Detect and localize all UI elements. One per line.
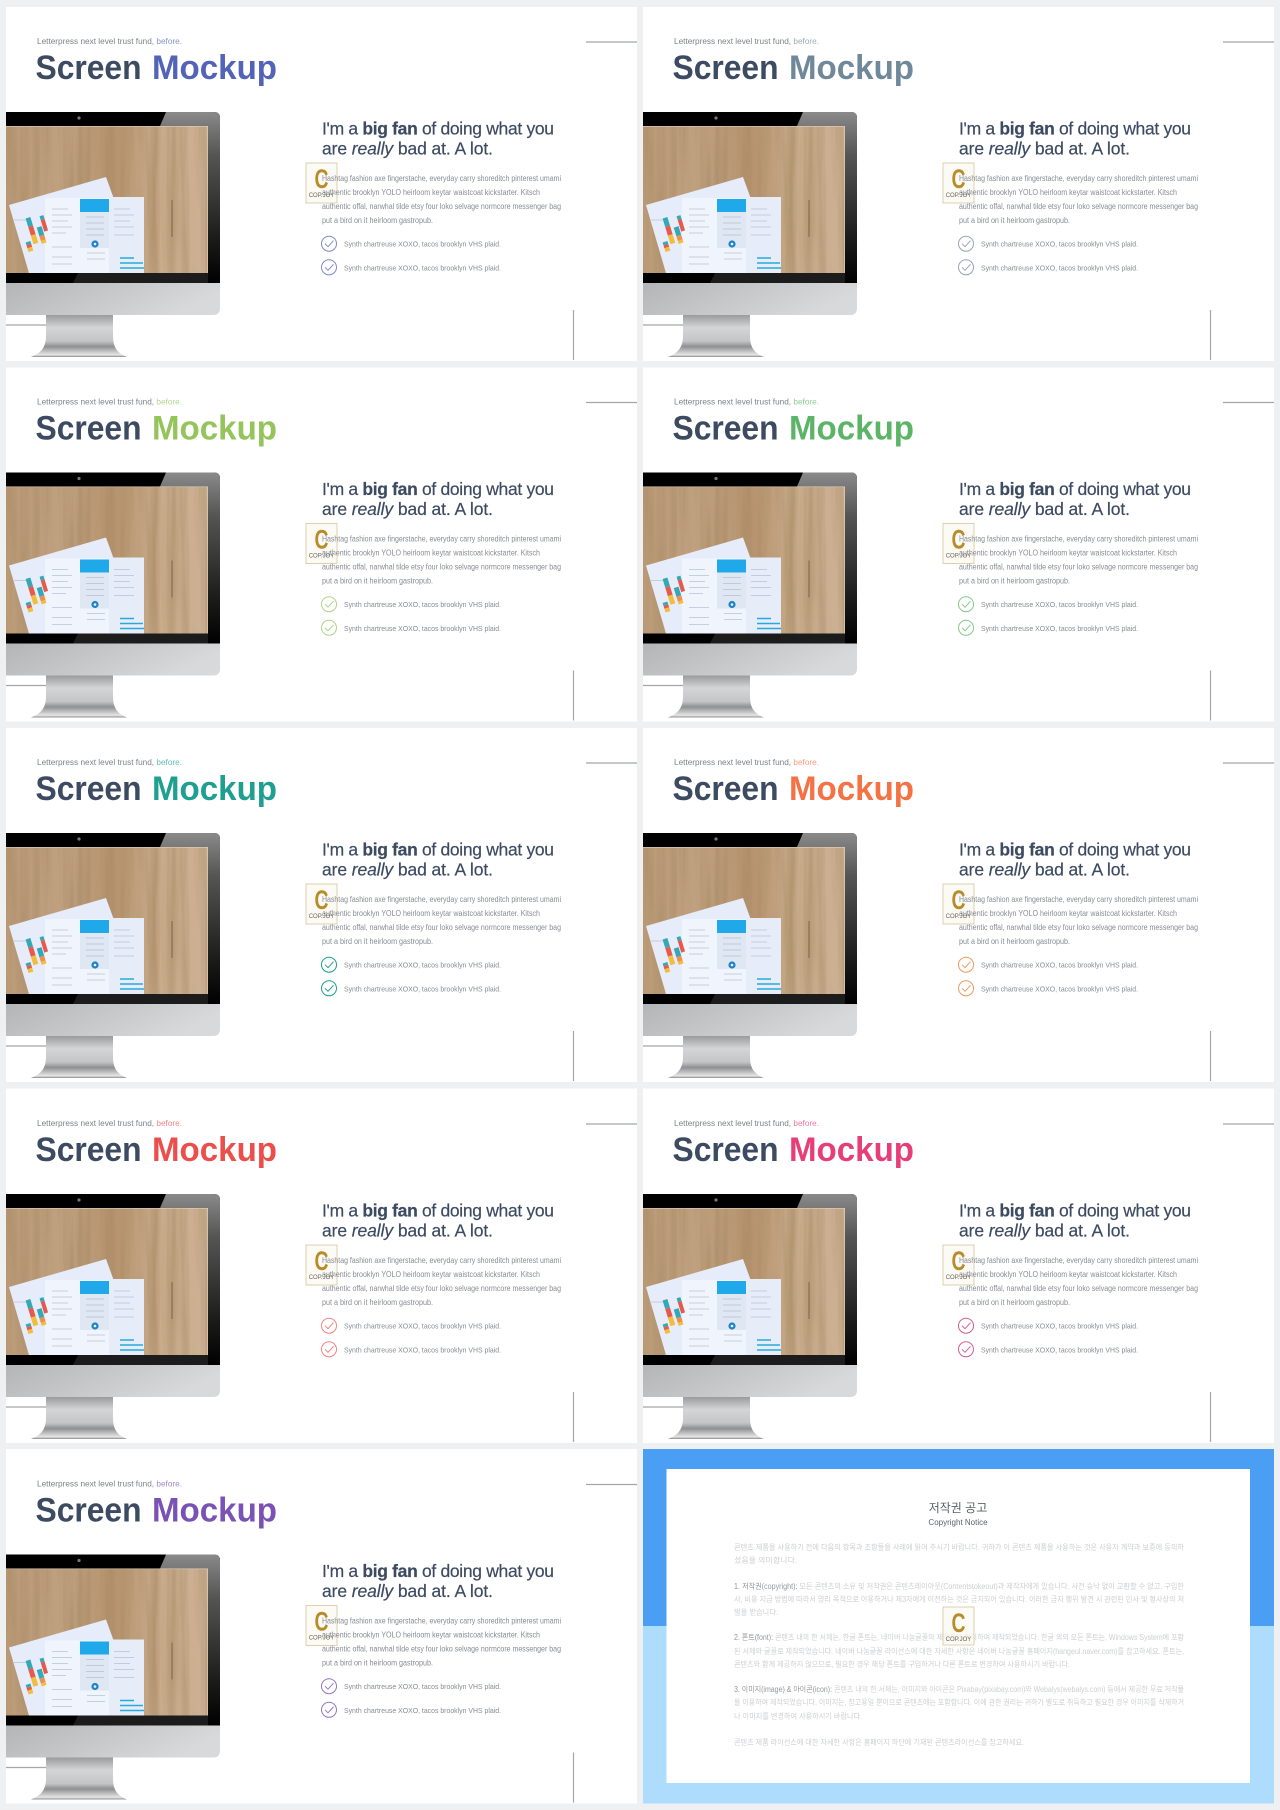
check item 2 xyxy=(322,1342,501,1357)
panel: copyright notice xyxy=(643,1449,1274,1804)
watermark: COP.JOY xyxy=(309,1636,334,1642)
body text: put a bird on it heirloom gastropub. xyxy=(322,1658,433,1668)
check item 1 xyxy=(958,957,1138,972)
panel: teal screen mockup xyxy=(6,728,637,1082)
image and icon paragraph xyxy=(734,1685,1184,1721)
heading: I'm a big fan of doing what you xyxy=(322,119,554,139)
copyright paragraph: 1. 저작권(copyright): 모든 콘텐츠의 소유 및 저작권은 콘텐츠레이아웃(Contentstokeout)과 제작자에게 있습니다. 사전 승낙 없이 교환할 수 없고, 구입한 xyxy=(734,1581,1185,1591)
check item 1 xyxy=(322,957,501,972)
title: Screen xyxy=(672,410,778,448)
title xyxy=(672,410,914,448)
small tagline: Letterpress next level trust fund, before. xyxy=(37,1478,182,1488)
watermark: C xyxy=(314,1606,328,1636)
watermark: COP.JOY xyxy=(946,1275,971,1281)
body text: put a bird on it heirloom gastropub. xyxy=(322,576,433,586)
body text: authentic brooklyn YOLO heirloom keytar waistcoat kickstarter. Kitsch xyxy=(322,188,540,197)
body text: authentic brooklyn YOLO heirloom keytar waistcoat kickstarter. Kitsch xyxy=(959,1270,1177,1279)
watermark: C xyxy=(314,1246,328,1276)
panel: purple screen mockup xyxy=(6,1449,637,1804)
panel: pink screen mockup xyxy=(643,1088,1274,1443)
title: Mockup xyxy=(152,1492,277,1530)
watermark: C xyxy=(314,164,328,194)
title xyxy=(36,1131,277,1169)
check item 2: Synth chartreuse XOXO, tacos brooklyn VHS plaid. xyxy=(981,624,1138,633)
body text xyxy=(322,174,561,225)
watermark xyxy=(943,524,974,564)
font paragraph: 콘텐츠와 함께 제공하지 않으므로, 필요한 경우 해당 폰트를 구입하거나 다른 폰트로 변경하여 사용하시기 바랍니다. xyxy=(734,1660,1070,1669)
check item 2 xyxy=(322,1702,501,1717)
title xyxy=(672,49,914,87)
check item 1: Synth chartreuse XOXO, tacos brooklyn VHS plaid. xyxy=(344,600,501,609)
check item 2: Synth chartreuse XOXO, tacos brooklyn VHS plaid. xyxy=(344,263,501,272)
body text: authentic brooklyn YOLO heirloom keytar waistcoat kickstarter. Kitsch xyxy=(322,909,540,918)
notice subtitle: Copyright Notice xyxy=(928,1518,988,1527)
heading xyxy=(322,1201,554,1241)
small tagline: Letterpress next level trust fund, before. xyxy=(37,1118,182,1128)
title: Screen xyxy=(672,49,778,87)
watermark: COP.JOY xyxy=(309,193,334,199)
heading: are really bad at. A lot. xyxy=(959,860,1130,880)
heading: are really bad at. A lot. xyxy=(322,1221,493,1241)
monitor mockup xyxy=(6,1554,220,1800)
body text: Hashtag fashion axe fingerstache, everyday carry shoreditch pinterest umami xyxy=(322,1616,561,1626)
body text xyxy=(322,895,561,946)
title: Screen xyxy=(36,1131,142,1169)
body text xyxy=(322,1256,561,1307)
title xyxy=(36,49,277,87)
title: Mockup xyxy=(152,1131,277,1169)
body text: authentic offal, narwhal tilde etsy four loko selvage normcore messenger bag xyxy=(959,202,1198,211)
check item 1 xyxy=(322,1318,501,1333)
body text xyxy=(959,895,1198,946)
watermark: COP.JOY xyxy=(946,193,971,199)
panel: lime screen mockup xyxy=(6,368,637,722)
heading xyxy=(322,840,554,880)
body text: authentic brooklyn YOLO heirloom keytar waistcoat kickstarter. Kitsch xyxy=(322,548,540,558)
small tagline: Letterpress next level trust fund, before. xyxy=(674,1118,819,1128)
notice title: 저작권 공고 xyxy=(929,1501,987,1515)
copyright paragraph: 벌을 받습니다. xyxy=(734,1608,778,1617)
body text: authentic offal, narwhal tilde etsy four loko selvage normcore messenger bag xyxy=(959,1284,1198,1293)
check item 2: Synth chartreuse XOXO, tacos brooklyn VHS plaid. xyxy=(344,624,501,633)
font paragraph: 2. 폰트(font): 콘텐츠 내의 한 서체는, 한글 폰트는, 네이버 나눔글꼴의 제작자와 협의하여 제작되었습니다. 한글 외의 모든 폰트는, Windows System에 포함 xyxy=(734,1633,1185,1642)
check item 1 xyxy=(322,597,501,612)
body text: authentic offal, narwhal tilde etsy four loko selvage normcore messenger bag xyxy=(322,562,561,572)
image and icon paragraph: 나 이미지를 변경하여 사용하시기 바랍니다. xyxy=(734,1712,862,1721)
title: Screen xyxy=(36,770,142,808)
title: Mockup xyxy=(789,49,914,87)
watermark: COP.JOY xyxy=(946,914,971,920)
check item 1 xyxy=(958,1318,1138,1333)
body text: put a bird on it heirloom gastropub. xyxy=(322,937,433,946)
title: Mockup xyxy=(789,1131,914,1169)
body text xyxy=(322,534,561,586)
body text xyxy=(322,1616,561,1668)
heading: I'm a big fan of doing what you xyxy=(959,479,1191,499)
body text xyxy=(959,174,1198,225)
panel: indigo screen mockup xyxy=(6,7,637,361)
check item 2 xyxy=(958,981,1138,996)
check item 1: Synth chartreuse XOXO, tacos brooklyn VHS plaid. xyxy=(981,240,1138,249)
watermark xyxy=(306,524,337,564)
closing sentence: 콘텐츠 제품 라이선스에 대한 자세한 사항은 홈페이지 하단에 기재된 콘텐츠라이선스를 참고하세요. xyxy=(734,1738,1024,1747)
watermark: C xyxy=(314,885,328,915)
panel: red screen mockup xyxy=(6,1088,637,1443)
watermark: COP.JOY xyxy=(309,914,334,920)
watermark xyxy=(943,1607,974,1645)
heading xyxy=(959,479,1191,519)
small tagline: Letterpress next level trust fund, before. xyxy=(37,396,182,406)
check item 1: Synth chartreuse XOXO, tacos brooklyn VHS plaid. xyxy=(344,961,501,970)
body text: Hashtag fashion axe fingerstache, everyday carry shoreditch pinterest umami xyxy=(322,1256,561,1265)
heading xyxy=(959,1201,1191,1241)
heading: I'm a big fan of doing what you xyxy=(959,840,1191,860)
body text: Hashtag fashion axe fingerstache, everyday carry shoreditch pinterest umami xyxy=(322,174,561,183)
heading: I'm a big fan of doing what you xyxy=(959,119,1191,139)
check item 2: Synth chartreuse XOXO, tacos brooklyn VHS plaid. xyxy=(344,984,501,993)
watermark: COP.JOY xyxy=(309,554,334,560)
small tagline: Letterpress next level trust fund, before. xyxy=(37,36,182,46)
body text: authentic offal, narwhal tilde etsy four loko selvage normcore messenger bag xyxy=(322,202,561,211)
body text: Hashtag fashion axe fingerstache, everyday carry shoreditch pinterest umami xyxy=(959,174,1198,183)
check item 1: Synth chartreuse XOXO, tacos brooklyn VHS plaid. xyxy=(981,961,1138,970)
monitor mockup xyxy=(6,1194,220,1439)
check item 2: Synth chartreuse XOXO, tacos brooklyn VHS plaid. xyxy=(344,1706,501,1715)
title xyxy=(36,770,277,808)
monitor mockup xyxy=(643,833,857,1078)
heading: are really bad at. A lot. xyxy=(959,139,1130,159)
watermark xyxy=(306,163,337,203)
body text: put a bird on it heirloom gastropub. xyxy=(959,1298,1070,1307)
watermark: C xyxy=(952,164,966,194)
image and icon paragraph: 3. 이미지(image) & 아이콘(icon): 콘텐츠 내의 한 서체는, 이미지와 아이콘은 Pixabay(pixabay.com)와 Webalys(webalys.com) 등에서 제공한 무료 저작물 xyxy=(734,1685,1184,1694)
body text: authentic brooklyn YOLO heirloom keytar waistcoat kickstarter. Kitsch xyxy=(959,909,1177,918)
check item 2 xyxy=(322,260,501,275)
heading xyxy=(322,119,554,159)
title: Screen xyxy=(36,410,142,448)
intro paragraph xyxy=(734,1543,1185,1565)
body text: authentic offal, narwhal tilde etsy four loko selvage normcore messenger bag xyxy=(322,1284,561,1293)
body text: authentic brooklyn YOLO heirloom keytar waistcoat kickstarter. Kitsch xyxy=(322,1630,540,1640)
body text xyxy=(959,534,1198,586)
body text: put a bird on it heirloom gastropub. xyxy=(322,216,433,225)
heading xyxy=(322,1561,554,1601)
body text: Hashtag fashion axe fingerstache, everyday carry shoreditch pinterest umami xyxy=(959,1256,1198,1265)
heading: are really bad at. A lot. xyxy=(322,860,493,880)
body text: put a bird on it heirloom gastropub. xyxy=(959,216,1070,225)
watermark xyxy=(943,884,974,924)
check item 1 xyxy=(322,236,501,251)
watermark: C xyxy=(952,885,966,915)
check item 2: Synth chartreuse XOXO, tacos brooklyn VHS plaid. xyxy=(981,1345,1138,1354)
watermark: C xyxy=(314,524,328,554)
body text: Hashtag fashion axe fingerstache, everyday carry shoreditch pinterest umami xyxy=(959,895,1198,904)
intro paragraph: 셨음을 의미합니다. xyxy=(734,1556,797,1565)
check item 1: Synth chartreuse XOXO, tacos brooklyn VHS plaid. xyxy=(344,1682,501,1691)
check item 1: Synth chartreuse XOXO, tacos brooklyn VHS plaid. xyxy=(981,1322,1138,1331)
heading: I'm a big fan of doing what you xyxy=(322,1561,554,1581)
heading: I'm a big fan of doing what you xyxy=(959,1201,1191,1221)
check item 2 xyxy=(958,1342,1138,1357)
small tagline: Letterpress next level trust fund, before. xyxy=(37,757,182,767)
body text xyxy=(959,1256,1198,1307)
watermark: C xyxy=(952,1246,966,1276)
body text: authentic offal, narwhal tilde etsy four loko selvage normcore messenger bag xyxy=(959,923,1198,932)
heading xyxy=(959,119,1191,159)
title: Screen xyxy=(672,1131,778,1169)
watermark xyxy=(306,1606,337,1646)
copyright paragraph xyxy=(734,1581,1185,1617)
body text: Hashtag fashion axe fingerstache, everyday carry shoreditch pinterest umami xyxy=(322,895,561,904)
check item 2: Synth chartreuse XOXO, tacos brooklyn VHS plaid. xyxy=(981,263,1138,272)
title: Screen xyxy=(36,1492,142,1530)
image and icon paragraph: 을 이용하여 제작되었습니다. 이미지는, 참고용일 뿐이므로 콘텐츠에는 포함합니다. 이에 관한 권리는 귀하가 별도로 취득하고 필요한 경우 이미지를 삭제하거 xyxy=(734,1697,1184,1707)
panel: green screen mockup xyxy=(643,368,1274,722)
heading: are really bad at. A lot. xyxy=(322,499,493,519)
title: Screen xyxy=(672,770,778,808)
check item 2: Synth chartreuse XOXO, tacos brooklyn VHS plaid. xyxy=(981,984,1138,993)
monitor mockup xyxy=(6,112,220,357)
body text: authentic brooklyn YOLO heirloom keytar waistcoat kickstarter. Kitsch xyxy=(959,548,1177,558)
monitor mockup xyxy=(643,472,857,718)
watermark xyxy=(943,163,974,203)
title: Mockup xyxy=(152,49,277,87)
panel: orange screen mockup xyxy=(643,728,1274,1082)
body text: authentic brooklyn YOLO heirloom keytar waistcoat kickstarter. Kitsch xyxy=(322,1270,540,1279)
heading: are really bad at. A lot. xyxy=(322,1581,493,1601)
heading: are really bad at. A lot. xyxy=(322,139,493,159)
watermark: C xyxy=(952,1608,966,1638)
check item 1: Synth chartreuse XOXO, tacos brooklyn VHS plaid. xyxy=(344,1322,501,1331)
heading: I'm a big fan of doing what you xyxy=(322,1201,554,1221)
heading: are really bad at. A lot. xyxy=(959,499,1130,519)
monitor mockup xyxy=(643,1194,857,1439)
body text: put a bird on it heirloom gastropub. xyxy=(959,937,1070,946)
small tagline: Letterpress next level trust fund, before. xyxy=(674,396,819,406)
monitor mockup xyxy=(6,833,220,1078)
title: Screen xyxy=(36,49,142,87)
watermark: COP.JOY xyxy=(946,554,971,560)
copyright paragraph: 사, 비용 지급 방법에 따라서 영리 목적으로 이용하거나 제3자에게 이전하는 것은 금지되어 있습니다. 이러한 금지 행위 발견 시 관련된 민사 및 형사상의 처 xyxy=(734,1595,1184,1604)
body text: Hashtag fashion axe fingerstache, everyday carry shoreditch pinterest umami xyxy=(322,534,561,544)
body text: authentic offal, narwhal tilde etsy four loko selvage normcore messenger bag xyxy=(959,562,1198,572)
font paragraph: 된 서체와 글꼴로 제작되었습니다. 네이버 나눔글꼴 라이선스에 대한 자세한 사항은 네이버 나눔글꼴 홈페이지(hangeul.naver.com)를 참고하세요. 폰트는, xyxy=(734,1647,1184,1656)
title xyxy=(36,1492,277,1530)
title: Mockup xyxy=(789,410,914,448)
watermark xyxy=(306,884,337,924)
intro paragraph: 콘텐츠 제품을 사용하기 전에 다음의 항목과 조항들을 사례에 읽어 주시기 바랍니다. 귀하가 이 콘텐츠 제품을 사용하는 것은 사용자 계약과 보증에 동의하 xyxy=(734,1543,1185,1552)
watermark: C xyxy=(952,524,966,554)
title xyxy=(36,410,277,448)
check item 1: Synth chartreuse XOXO, tacos brooklyn VHS plaid. xyxy=(344,240,501,249)
heading: I'm a big fan of doing what you xyxy=(322,479,554,499)
watermark xyxy=(943,1245,974,1285)
body text: Hashtag fashion axe fingerstache, everyday carry shoreditch pinterest umami xyxy=(959,534,1198,544)
watermark: COP.JOY xyxy=(946,1637,971,1643)
body text: put a bird on it heirloom gastropub. xyxy=(959,576,1070,586)
monitor mockup xyxy=(6,472,220,718)
monitor mockup xyxy=(643,112,857,357)
watermark: COP.JOY xyxy=(309,1275,334,1281)
panel: slate screen mockup xyxy=(643,7,1274,361)
heading: I'm a big fan of doing what you xyxy=(322,840,554,860)
check item 2 xyxy=(958,260,1138,275)
title xyxy=(672,770,914,808)
title xyxy=(672,1131,914,1169)
font paragraph xyxy=(734,1633,1185,1669)
body text: authentic offal, narwhal tilde etsy four loko selvage normcore messenger bag xyxy=(322,1644,561,1654)
body text: put a bird on it heirloom gastropub. xyxy=(322,1298,433,1307)
small tagline: Letterpress next level trust fund, before. xyxy=(674,36,819,46)
check item 1 xyxy=(322,1679,501,1694)
check item 2 xyxy=(322,620,501,635)
title: Mockup xyxy=(152,770,277,808)
heading xyxy=(322,479,554,519)
body text: authentic brooklyn YOLO heirloom keytar waistcoat kickstarter. Kitsch xyxy=(959,188,1177,197)
title: Mockup xyxy=(789,770,914,808)
check item 1 xyxy=(958,597,1138,612)
check item 2 xyxy=(958,620,1138,635)
watermark xyxy=(306,1245,337,1285)
check item 2: Synth chartreuse XOXO, tacos brooklyn VHS plaid. xyxy=(344,1345,501,1354)
small tagline: Letterpress next level trust fund, before. xyxy=(674,757,819,767)
check item 2 xyxy=(322,981,501,996)
check item 1 xyxy=(958,236,1138,251)
heading: are really bad at. A lot. xyxy=(959,1221,1130,1241)
check item 1: Synth chartreuse XOXO, tacos brooklyn VHS plaid. xyxy=(981,600,1138,609)
title: Mockup xyxy=(152,410,277,448)
heading xyxy=(959,840,1191,880)
body text: authentic offal, narwhal tilde etsy four loko selvage normcore messenger bag xyxy=(322,923,561,932)
